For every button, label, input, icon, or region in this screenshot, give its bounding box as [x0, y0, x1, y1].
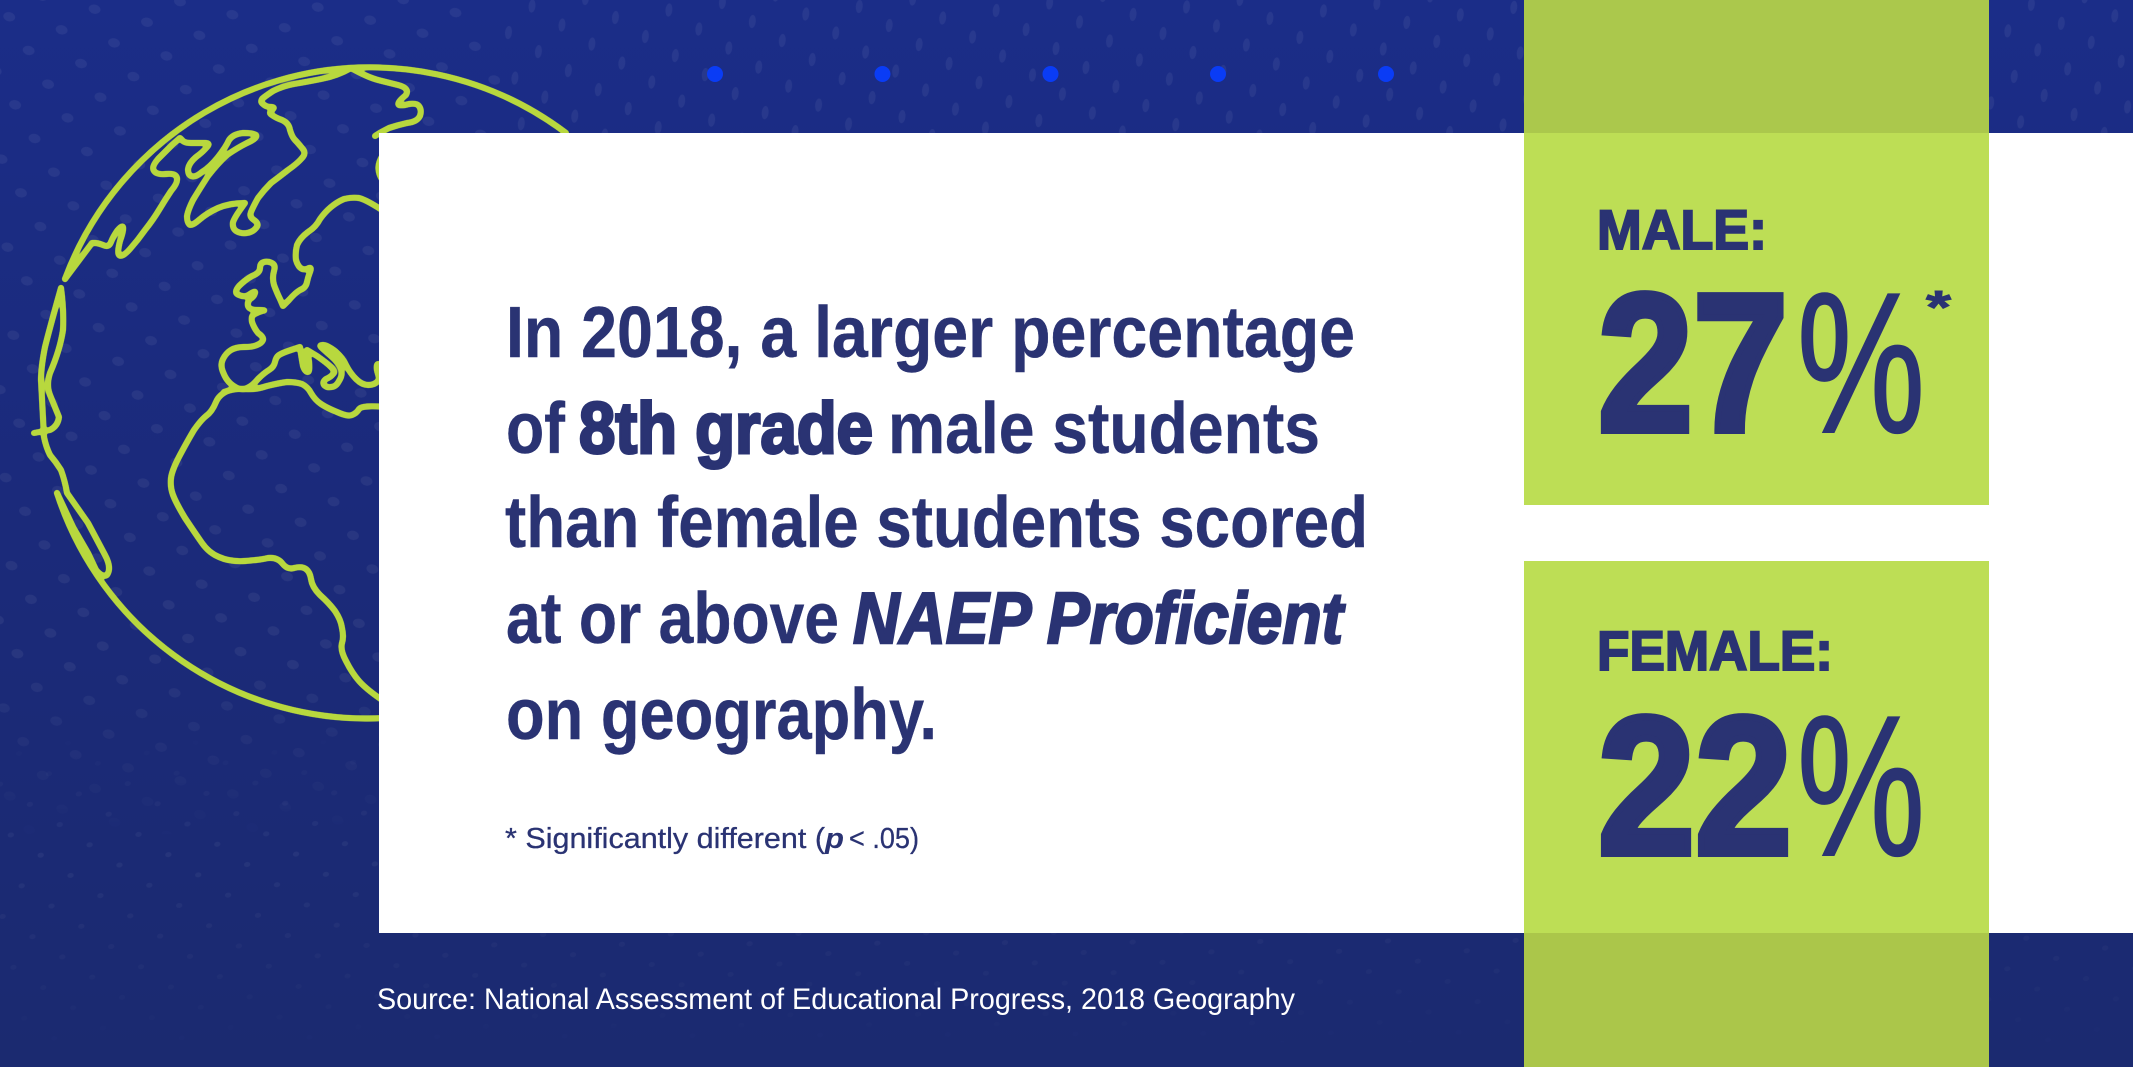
heading: female: FEMALE:: [1597, 619, 1833, 682]
panel: female statistic: [1524, 561, 1989, 933]
text block: main statement: at or above: [506, 579, 839, 659]
footnote: * Significantly different (: [505, 823, 825, 855]
top dark green band: [1524, 0, 1989, 133]
panel: male statistic: [1524, 133, 1989, 505]
coastline: arctic and north: [65, 68, 351, 279]
icon: globe outline: [34, 67, 566, 719]
panel: white content card: [379, 133, 2133, 933]
coastline: lower continent top edge: [224, 382, 385, 416]
text block: main statement: In 2018, a larger percentage: [506, 293, 1355, 373]
coastline: left sliver: [41, 288, 109, 576]
coastline: left sliver inner: [34, 288, 63, 433]
text block: main statement: on geography.: [506, 675, 937, 755]
value: percent sign: %: [1797, 675, 1925, 898]
emphasis: NAEP Proficient: NAEP Proficient: [853, 579, 1346, 659]
emphasis: 8th grade: 8th grade: [579, 389, 873, 469]
globe circle upper arc: [65, 67, 566, 279]
globe circle lower arc: [57, 493, 385, 719]
significance asterisk: *: [1926, 281, 1951, 333]
coastline: small bump: [378, 155, 383, 181]
heading: male: MALE:: [1597, 198, 1767, 261]
text block: main statement: [505, 293, 1368, 755]
decorative blue dots row: [707, 66, 1394, 82]
coastline: north east: [351, 68, 421, 136]
coastline: lower continent west edge: [171, 388, 385, 702]
value: percent sign: %: [1797, 252, 1925, 475]
source line: Source: National Assessment of Educational Progress, 2018 Geography: [377, 983, 1295, 1016]
text block: main statement: than female students scored: [505, 483, 1368, 563]
footnote: p: [824, 823, 844, 855]
value: 22: 22: [1598, 676, 1792, 896]
coastline: central landmass: [222, 198, 385, 389]
bottom dark green band: [1524, 933, 1989, 1067]
text block: main statement: male students: [888, 389, 1320, 469]
footnote: < .05): [849, 823, 919, 855]
text block: main statement: of: [506, 389, 566, 469]
value: 27: 27: [1598, 254, 1788, 472]
